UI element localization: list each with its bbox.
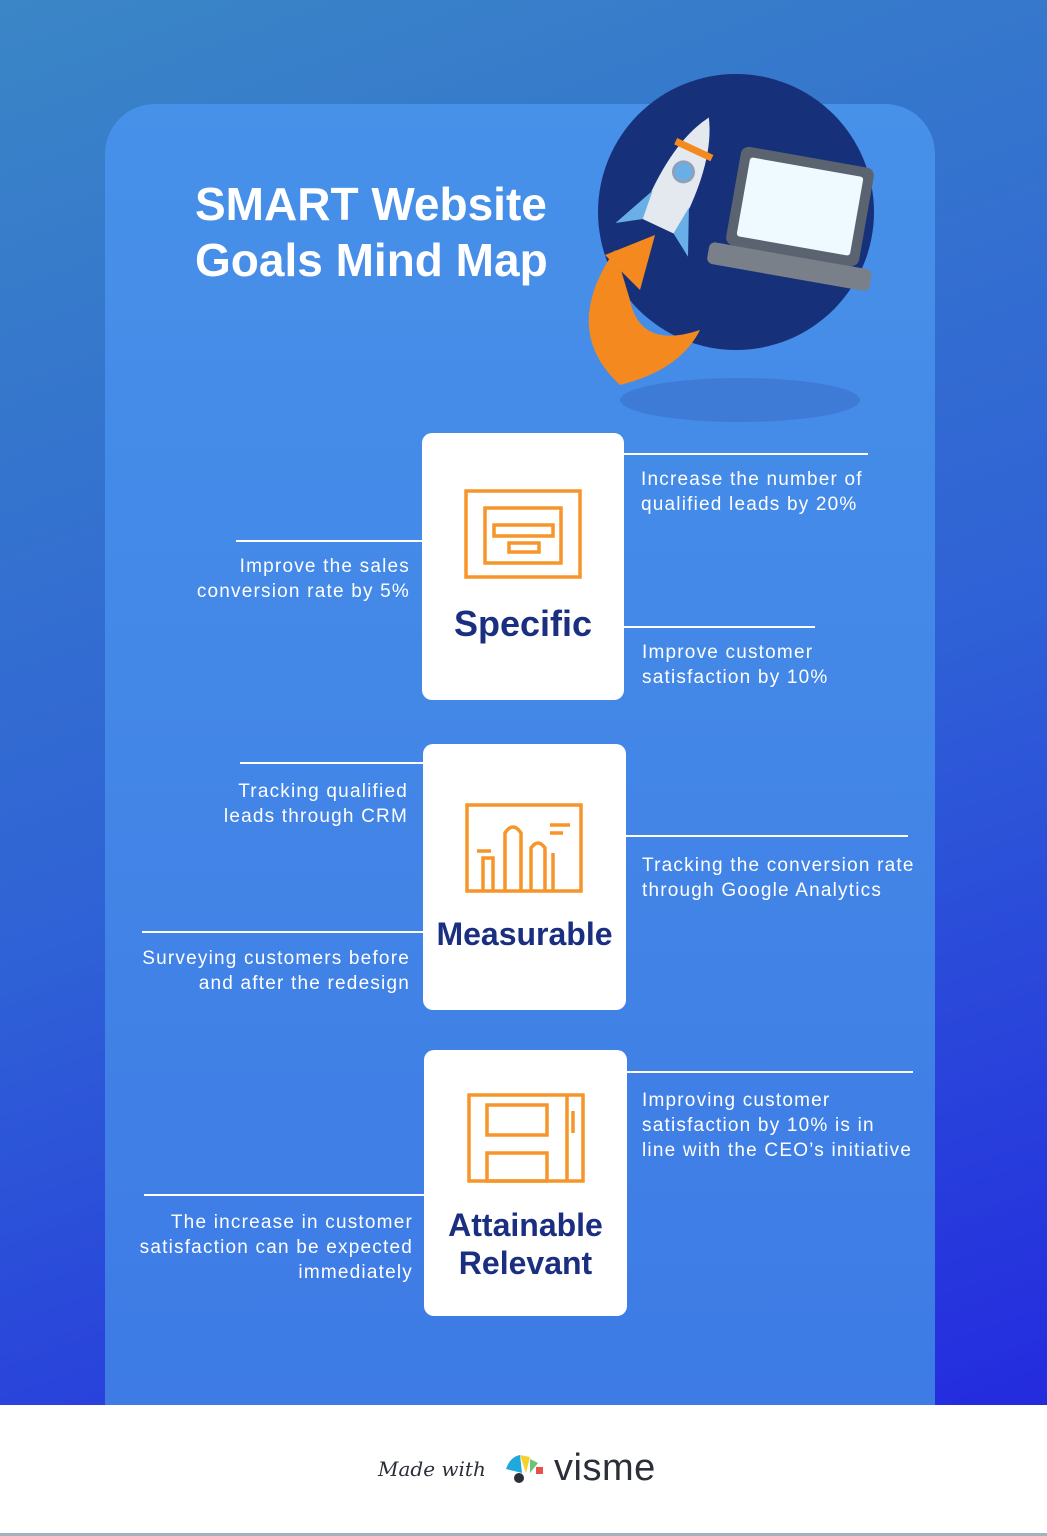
card: Attainable Relevant: Relevant bbox=[459, 1245, 592, 1281]
icon: chart bbox=[465, 803, 583, 893]
branch: surveying: and after the redesign bbox=[199, 973, 410, 994]
card: Specific bbox=[422, 433, 624, 700]
branch: CEO initiative bbox=[627, 1071, 913, 1161]
branch: immediately: The increase in customer bbox=[171, 1212, 413, 1233]
footer logo: Made with bbox=[378, 1457, 486, 1481]
card: Attainable Relevant: Attainable bbox=[448, 1207, 603, 1243]
branch: CRM: leads through CRM bbox=[224, 806, 408, 827]
footer logo: visme bbox=[554, 1447, 656, 1489]
branch: Google Analytics bbox=[626, 835, 915, 901]
card: Measurable: Measurable bbox=[436, 916, 613, 952]
branch: immediately: satisfaction can be expected bbox=[140, 1237, 413, 1258]
branch: sales conversion: conversion rate by 5% bbox=[197, 581, 410, 602]
branch: immediately: immediately bbox=[298, 1262, 413, 1283]
branch: CEO initiative: line with the CEO’s initiative bbox=[642, 1140, 912, 1161]
branch: qualified leads: qualified leads by 20% bbox=[641, 494, 858, 515]
branch: Google Analytics: through Google Analytics bbox=[642, 880, 882, 901]
branch: CRM bbox=[224, 762, 423, 827]
branch: surveying: Surveying customers before bbox=[142, 948, 410, 969]
main panel bbox=[105, 104, 935, 1405]
icon: floppy bbox=[467, 1093, 585, 1183]
branch: CRM: Tracking qualified bbox=[238, 781, 408, 802]
branch: Google Analytics: Tracking the conversion rate bbox=[642, 855, 915, 876]
card: Attainable Relevant bbox=[424, 1050, 627, 1316]
branch: qualified leads bbox=[624, 453, 868, 515]
branch: surveying bbox=[142, 931, 423, 994]
illustration: rocket and laptop bbox=[588, 74, 874, 422]
icon: browser form bbox=[464, 489, 582, 579]
card: Specific: Specific bbox=[454, 603, 592, 644]
branch: CEO initiative: satisfaction by 10% is in bbox=[642, 1115, 875, 1136]
title: Goals Mind Map bbox=[195, 234, 548, 286]
branch: customer satisfaction bbox=[624, 626, 828, 688]
footer logo bbox=[378, 1447, 656, 1489]
branch: CEO initiative: Improving customer bbox=[642, 1090, 830, 1111]
branch: sales conversion bbox=[197, 540, 422, 602]
branch: customer satisfaction: Improve customer bbox=[642, 642, 813, 663]
title bbox=[195, 178, 548, 286]
title: SMART Website bbox=[195, 178, 547, 230]
card: Measurable bbox=[423, 744, 626, 1010]
branch: customer satisfaction: satisfaction by 10% bbox=[642, 667, 828, 688]
branch: qualified leads: Increase the number of bbox=[641, 469, 863, 490]
branch: sales conversion: Improve the sales bbox=[240, 556, 410, 577]
branch: immediately bbox=[140, 1194, 424, 1283]
footer bbox=[0, 1405, 1047, 1536]
